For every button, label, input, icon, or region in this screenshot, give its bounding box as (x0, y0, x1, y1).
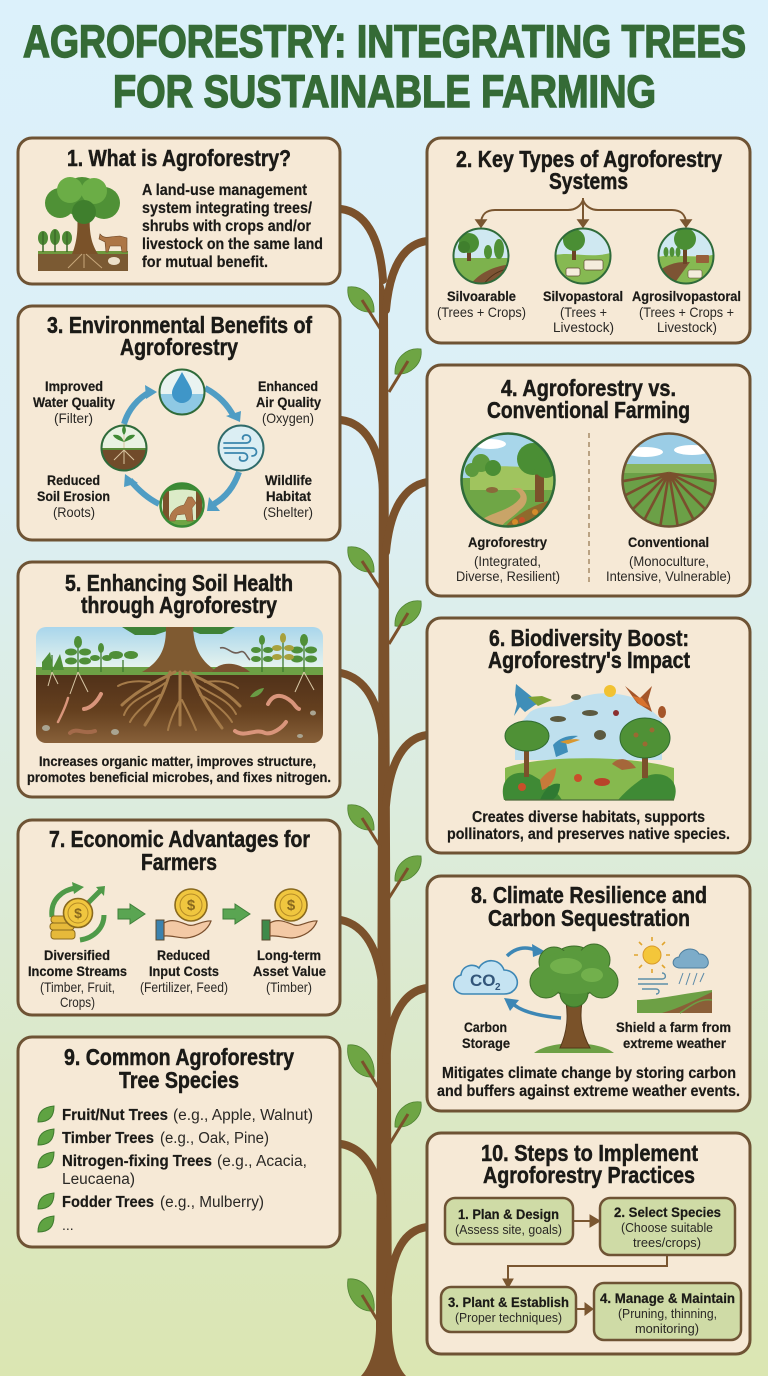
icon: coin above hand (156, 889, 211, 940)
label: diversified income: Diversified (44, 948, 110, 963)
label: carbon storage (462, 1020, 510, 1051)
label: reduced input costs: Input Costs (149, 964, 219, 979)
flow arrows (503, 1215, 667, 1315)
step 3: (Proper techniques) (455, 1310, 562, 1325)
label: wildlife (263, 473, 313, 520)
label: reduced input costs (140, 948, 228, 995)
heading 2: Systems (549, 168, 628, 194)
label: silvopastoral (543, 288, 623, 335)
icon: silvopastoral (554, 228, 612, 284)
carbon cycle arrows (504, 944, 561, 1018)
label: conventional: Intensive, Vulnerable) (606, 568, 731, 584)
label: agroforestry: Diverse, Resilient) (456, 568, 560, 584)
description: promotes beneficial microbes, and fixes nitrogen. (27, 770, 331, 785)
icon: conventional monoculture field (618, 433, 720, 528)
heading 6 (488, 625, 690, 673)
description (437, 1065, 740, 1100)
label: conventional: (Monoculture, (629, 553, 709, 569)
step 3 (441, 1287, 576, 1332)
label: soil erosion (37, 473, 110, 520)
label: shield a farm: extreme weather (623, 1036, 727, 1051)
list text: ... (62, 1217, 74, 1233)
heading 2: 2. Key Types of Agroforestry (456, 146, 722, 172)
heading 10: 10. Steps to Implement (481, 1140, 698, 1166)
step 4: monitoring) (635, 1321, 699, 1336)
step 2: (Choose suitable (621, 1220, 713, 1235)
label: conventional: Conventional (628, 534, 709, 550)
label: wildlife: Wildlife (265, 473, 312, 488)
arrow (223, 904, 250, 924)
label: wildlife: Habitat (266, 489, 311, 504)
heading 5: 5. Enhancing Soil Health (65, 570, 293, 596)
arrows: branching to three systems (476, 198, 691, 227)
label: water quality: Water Quality (33, 395, 115, 410)
step 4: 4. Manage & Maintain (600, 1291, 735, 1306)
divider (588, 433, 590, 584)
label: air quality: Air Quality (256, 395, 321, 410)
step 4: (Pruning, thinning, (618, 1306, 717, 1321)
label: agroforestry: (Integrated, (474, 553, 541, 569)
panel: 3 environmental benefits (18, 306, 340, 540)
list text: Fodder Trees (62, 1194, 154, 1211)
cycle arrows (124, 385, 241, 511)
icon: silvoarable (452, 228, 510, 284)
list text: Nitrogen-fixing Trees (62, 1153, 212, 1170)
label: agrosilvopastoral: Agrosilvopastoral (632, 288, 741, 304)
icon: agroforestry landscape (460, 432, 558, 530)
label: carbon storage: Storage (462, 1036, 510, 1051)
list text (62, 1107, 313, 1233)
description: A land-use management (142, 182, 307, 199)
label: agrosilvopastoral: Livestock) (657, 319, 717, 335)
description: system integrating trees/ (142, 200, 313, 217)
heading 8: 8. Climate Resilience and (471, 882, 707, 908)
icon: co2 cloud (454, 961, 517, 994)
heading 3: Agroforestry (120, 334, 238, 360)
label: diversified income: Income Streams (28, 964, 127, 979)
list text: Timber Trees (62, 1130, 154, 1147)
icon: coin above hand: $ (187, 897, 196, 914)
heading 3: 3. Environmental Benefits of (47, 312, 312, 338)
panel: 4 agroforestry vs conventional (427, 365, 750, 596)
icon: agrosilvopastoral (658, 228, 714, 284)
description: Increases organic matter, improves structure, (39, 754, 316, 769)
label: soil erosion: (Roots) (53, 504, 95, 520)
icon: coin above hand, long-term: $ (287, 897, 296, 914)
heading 7 (49, 826, 310, 875)
description: for mutual benefit. (142, 254, 268, 271)
icon: extreme weather over farm (634, 937, 712, 1013)
heading 7: Farmers (141, 849, 217, 875)
step 3: 3. Plant & Establish (448, 1295, 569, 1310)
panel: 1 what is agroforestry (18, 138, 340, 284)
heading 9: 9. Common Agroforestry (64, 1044, 294, 1070)
label: silvopastoral: (Trees + (560, 304, 607, 320)
central tree trunk with branches and leaves (341, 209, 427, 1376)
step 4 (594, 1283, 741, 1340)
heading 1: 1. What is Agroforestry? (67, 145, 291, 171)
label: air quality: Enhanced (258, 379, 318, 394)
panel: 10 implementation steps (427, 1133, 750, 1354)
icon: co2 cloud: CO (470, 971, 496, 990)
list text: Fruit/Nut Trees (62, 1107, 168, 1124)
heading 2 (456, 146, 722, 194)
icon: wind (218, 426, 264, 470)
heading 9: Tree Species (119, 1067, 239, 1093)
description (27, 754, 331, 785)
label: conventional (606, 534, 731, 584)
panel: 9 tree species (18, 1037, 340, 1247)
heading 10: Agroforestry Practices (483, 1162, 695, 1188)
heading 8 (471, 882, 707, 931)
label: silvopastoral: Livestock) (553, 319, 614, 335)
label: agroforestry: Agroforestry (468, 534, 547, 550)
label: shield a farm (616, 1020, 731, 1051)
icon: tree with crops and livestock (38, 177, 128, 271)
description: and buffers against extreme weather events. (437, 1083, 740, 1100)
panel: 8 climate resilience (427, 876, 750, 1111)
icon: water (158, 368, 206, 418)
description: shrubs with crops and/or (142, 218, 311, 235)
label: diversified income (28, 948, 127, 1010)
label: reduced input costs: (Fertilizer, Feed) (140, 979, 228, 995)
step 2: 2. Select Species (614, 1205, 721, 1220)
step 1: 1. Plan & Design (458, 1207, 559, 1222)
label: air quality: (Oxygen) (262, 410, 314, 426)
label: water quality: (Filter) (54, 410, 93, 426)
title (23, 16, 746, 117)
label: soil erosion: Soil Erosion (37, 489, 110, 504)
icon: animal in habitat (160, 484, 204, 529)
step 2: trees/crops) (633, 1235, 701, 1250)
step 1 (445, 1198, 573, 1244)
heading 7: 7. Economic Advantages for (49, 826, 310, 852)
description: pollinators, and preserves native species. (447, 826, 730, 843)
list text: (e.g., Apple, Walnut) (173, 1107, 313, 1124)
heading 8: Carbon Sequestration (488, 905, 690, 931)
icon: sprout in soil (100, 425, 148, 473)
label: shield a farm: Shield a farm from (616, 1020, 731, 1035)
label: long-term asset: (Timber) (266, 979, 312, 995)
step 1: (Assess site, goals) (455, 1222, 562, 1237)
label: soil erosion: Reduced (47, 473, 100, 488)
label: long-term asset (253, 948, 326, 995)
icon: diversified income coins (50, 882, 105, 940)
label: water quality (33, 379, 115, 426)
heading 9 (64, 1044, 294, 1093)
list text: Leucaena) (62, 1171, 135, 1188)
label: silvoarable (437, 288, 526, 320)
label: long-term asset: Asset Value (253, 964, 326, 979)
panel: 7 economic advantages (18, 820, 340, 1015)
description: Mitigates climate change by storing carbon (442, 1065, 736, 1082)
label: long-term asset: Long-term (257, 948, 321, 963)
label: carbon storage: Carbon (464, 1020, 507, 1035)
heading 10 (481, 1140, 698, 1188)
icon: co2 cloud: 2 (495, 982, 501, 993)
heading 4 (487, 375, 690, 423)
illustration: soil cross-section with roots and worms (36, 627, 323, 743)
label: air quality (256, 379, 321, 426)
label: silvoarable: Silvoarable (447, 288, 516, 304)
panel: 5 soil health (18, 562, 340, 797)
label: silvopastoral: Silvopastoral (543, 288, 623, 304)
label: reduced input costs: Reduced (157, 948, 210, 963)
description: livestock on the same land (142, 236, 323, 253)
label: diversified income: Crops) (60, 994, 95, 1010)
list bullets: leaves (38, 1106, 54, 1232)
label: agrosilvopastoral: (Trees + Crops + (639, 304, 734, 320)
panel: 6 biodiversity (427, 618, 750, 853)
label: agrosilvopastoral (632, 288, 741, 335)
step 2 (600, 1198, 735, 1255)
description (142, 182, 323, 271)
heading 6: Agroforestry's Impact (488, 647, 690, 673)
heading 6: 6. Biodiversity Boost: (489, 625, 689, 651)
description (447, 809, 730, 843)
heading 5 (65, 570, 293, 618)
title: FOR SUSTAINABLE FARMING (113, 66, 656, 117)
panel: 2 key types (427, 138, 750, 343)
heading 4: 4. Agroforestry vs. (501, 375, 676, 401)
illustration: biodiversity scene (503, 684, 676, 800)
icon: coin above hand, long-term (262, 889, 317, 940)
heading 4: Conventional Farming (487, 397, 690, 423)
label: silvoarable: (Trees + Crops) (437, 304, 526, 320)
icon: large tree (530, 944, 618, 1053)
list text: (e.g., Acacia, (217, 1153, 307, 1170)
icon: diversified income coins: $ (74, 905, 82, 921)
label: water quality: Improved (45, 379, 103, 394)
label: diversified income: (Timber, Fruit, (40, 979, 115, 995)
list text: (e.g., Oak, Pine) (160, 1130, 269, 1147)
arrow (118, 904, 145, 924)
description: Creates diverse habitats, supports (472, 809, 705, 826)
label: wildlife: (Shelter) (263, 504, 313, 520)
heading 3 (47, 312, 312, 360)
list text: (e.g., Mulberry) (160, 1194, 264, 1211)
heading 5: through Agroforestry (81, 592, 277, 618)
label: agroforestry (456, 534, 560, 584)
